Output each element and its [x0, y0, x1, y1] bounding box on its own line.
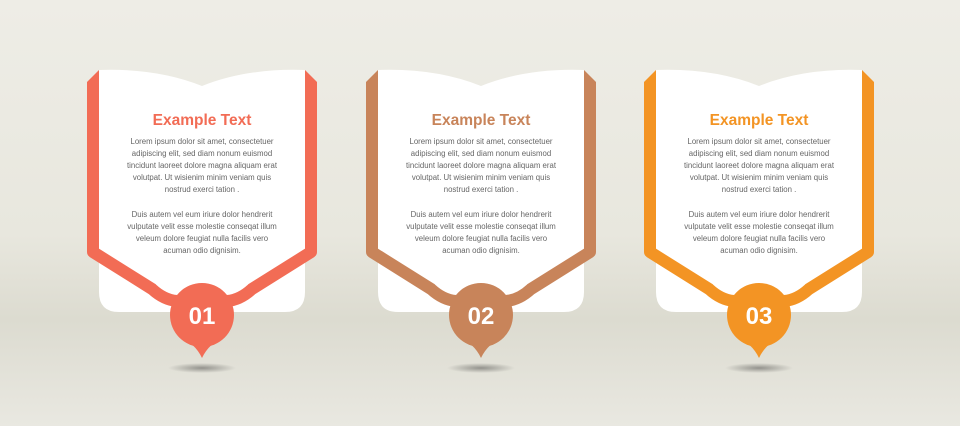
heading: Example Text — [710, 112, 808, 129]
body text: nostrud exerci tation . — [444, 185, 518, 194]
heading: Example Text — [153, 112, 251, 129]
body text: tincidunt laoreet dolore magna aliquam erat — [406, 161, 557, 170]
white panel — [99, 70, 305, 312]
body text: Lorem ipsum dolor sit amet, consectetuer — [409, 137, 553, 146]
card 3 — [644, 70, 874, 373]
body text: Duis autem vel eum iriure dolor hendrerit — [132, 210, 273, 219]
body text: volutpat. Ut wisienim minim veniam quis — [133, 173, 271, 182]
body text — [406, 137, 557, 255]
body text: adipiscing elit, sed diam nonum euismod — [689, 149, 829, 158]
body text — [684, 137, 835, 255]
body text: nostrud exerci tation . — [722, 185, 796, 194]
white panel — [378, 70, 584, 312]
number badge: 01 — [189, 303, 215, 330]
body text — [127, 137, 278, 255]
number badge — [449, 283, 513, 358]
body text: acuman odio dignisim. — [442, 246, 520, 255]
body text: Duis autem vel eum iriure dolor hendrerit — [689, 210, 830, 219]
body text: adipiscing elit, sed diam nonum euismod — [132, 149, 272, 158]
body text: veleum dolore feugiat nulla facilis vero — [693, 234, 826, 243]
band — [372, 82, 590, 301]
white panel — [656, 70, 862, 312]
body text: tincidunt laoreet dolore magna aliquam erat — [127, 161, 278, 170]
body text: nostrud exerci tation . — [165, 185, 239, 194]
body text: adipiscing elit, sed diam nonum euismod — [411, 149, 551, 158]
body text: Lorem ipsum dolor sit amet, consectetuer — [687, 137, 831, 146]
number badge — [727, 283, 791, 358]
number badge: 02 — [468, 303, 494, 330]
card 2 — [366, 70, 596, 373]
body text: acuman odio dignisim. — [720, 246, 798, 255]
body text: vulputate velit esse molestie conseqat illum — [127, 222, 277, 231]
body text: veleum dolore feugiat nulla facilis vero — [136, 234, 269, 243]
body text: volutpat. Ut wisienim minim veniam quis — [690, 173, 828, 182]
band — [650, 82, 868, 301]
body text: Lorem ipsum dolor sit amet, consectetuer — [130, 137, 274, 146]
body text: veleum dolore feugiat nulla facilis vero — [415, 234, 548, 243]
number badge: 03 — [746, 303, 772, 330]
band — [93, 82, 311, 301]
card 1 — [87, 70, 317, 373]
heading: Example Text — [432, 112, 530, 129]
body text: volutpat. Ut wisienim minim veniam quis — [412, 173, 550, 182]
body text: Duis autem vel eum iriure dolor hendrerit — [411, 210, 552, 219]
body text: acuman odio dignisim. — [163, 246, 241, 255]
number badge — [170, 283, 234, 358]
body text: vulputate velit esse molestie conseqat illum — [684, 222, 834, 231]
body text: tincidunt laoreet dolore magna aliquam erat — [684, 161, 835, 170]
body text: vulputate velit esse molestie conseqat illum — [406, 222, 556, 231]
